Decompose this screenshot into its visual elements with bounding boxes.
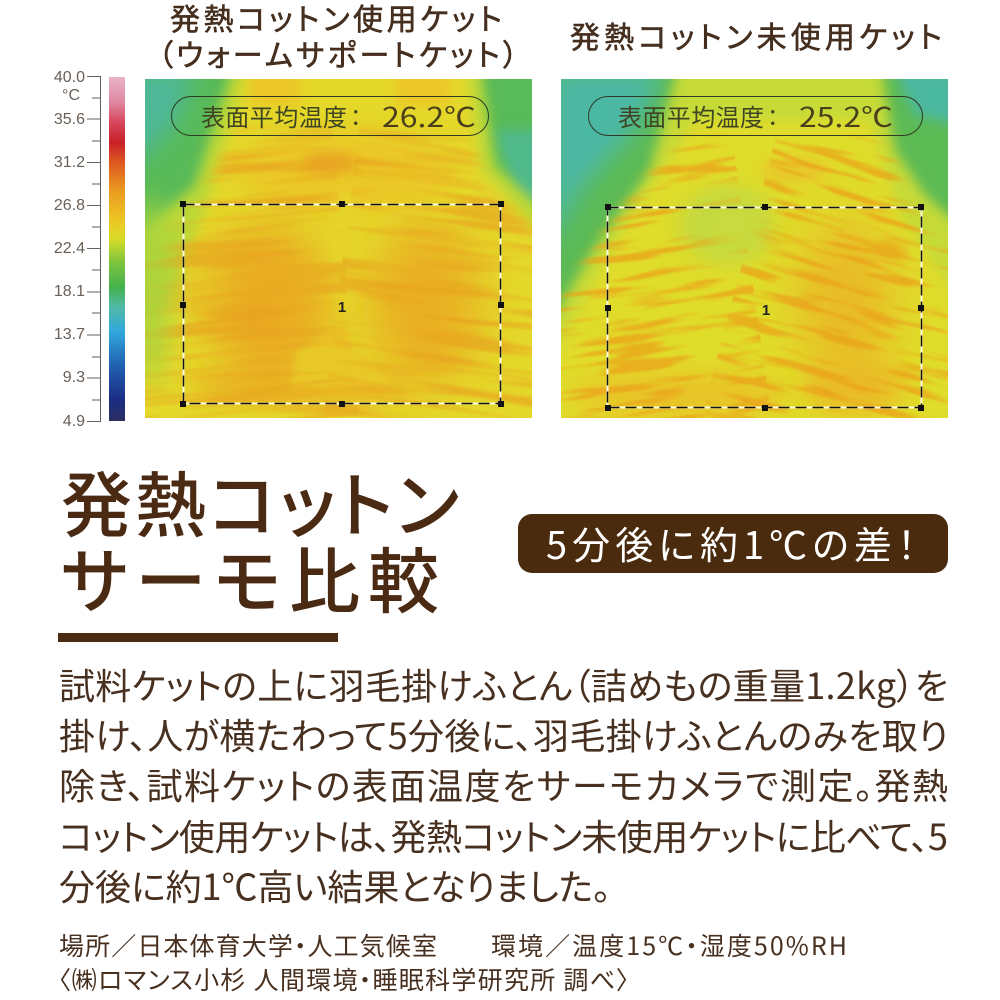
thermal background bbox=[561, 79, 948, 418]
heading: left thermal image: （ウォームサポートケット） bbox=[158, 31, 518, 75]
thermal background bbox=[145, 79, 532, 418]
title underline bbox=[58, 633, 338, 642]
measurement box: 1 bbox=[762, 302, 770, 319]
scale labels: 4.9 bbox=[63, 413, 85, 430]
scale labels: 40.0 bbox=[54, 69, 85, 86]
description text: 掛け、人が横たわって5分後に、羽毛掛けふとんのみを取り bbox=[59, 708, 948, 760]
scale labels: 18.1 bbox=[54, 283, 85, 300]
scale labels: 9.3 bbox=[63, 369, 85, 386]
scale ticks bbox=[87, 76, 101, 422]
thermal image: with heat-generating cotton bbox=[145, 79, 532, 418]
average temperature pill: 表面平均温度 bbox=[618, 98, 764, 133]
heading: right thermal image: 発熱コットン未使用ケット bbox=[570, 13, 942, 57]
average temperature pill bbox=[588, 96, 922, 136]
callout: about 1 degree difference: 5分後に約1℃の差！ bbox=[546, 515, 916, 570]
description text: コットン使用ケットは、発熱コットン未使用ケットに比べて、5 bbox=[59, 809, 948, 861]
scale labels bbox=[54, 69, 85, 430]
thermal image: without heat-generating cotton bbox=[561, 79, 948, 418]
test conditions note: 環境／温度15℃・湿度50%RH bbox=[491, 927, 847, 963]
description text: 試料ケットの上に羽毛掛けふとん（詰めもの重量1.2kg）を bbox=[59, 658, 948, 710]
measurement box bbox=[605, 204, 924, 411]
scale labels: 31.2 bbox=[54, 154, 85, 171]
average temperature pill bbox=[172, 96, 488, 136]
average temperature pill: 表面平均温度 bbox=[201, 98, 347, 133]
scale labels: 35.6 bbox=[54, 111, 85, 128]
scale labels: 13.7 bbox=[54, 326, 85, 343]
average temperature pill: ： bbox=[350, 99, 362, 133]
test conditions note bbox=[58, 927, 847, 997]
measurement box: 1 bbox=[338, 299, 346, 316]
description text: 分後に約1℃高い結果となりました。 bbox=[59, 859, 611, 911]
main title bbox=[61, 450, 459, 628]
main title: 発熱コットン bbox=[61, 450, 459, 552]
scale labels: 26.8 bbox=[54, 197, 85, 214]
test conditions note: 場所／日本体育大学・人工気候室 bbox=[59, 927, 437, 963]
main title: サーモ比較 bbox=[61, 526, 439, 628]
description text: 除き、試料ケットの表面温度をサーモカメラで測定。発熱 bbox=[59, 758, 948, 810]
average temperature pill: 26.2℃ bbox=[382, 96, 476, 135]
average temperature pill: 25.2℃ bbox=[799, 96, 893, 135]
test conditions note: 〈㈱ロマンス小杉 人間環境・睡眠科学研究所 調べ〉 bbox=[58, 961, 629, 997]
description text bbox=[59, 658, 948, 911]
scale labels: °C bbox=[62, 87, 80, 104]
scale labels: 22.4 bbox=[54, 240, 85, 257]
heading: left thermal image bbox=[158, 0, 518, 75]
average temperature pill: ： bbox=[767, 99, 778, 133]
measurement box bbox=[180, 201, 504, 407]
temperature scale bbox=[54, 69, 125, 430]
colour bar bbox=[109, 77, 125, 421]
